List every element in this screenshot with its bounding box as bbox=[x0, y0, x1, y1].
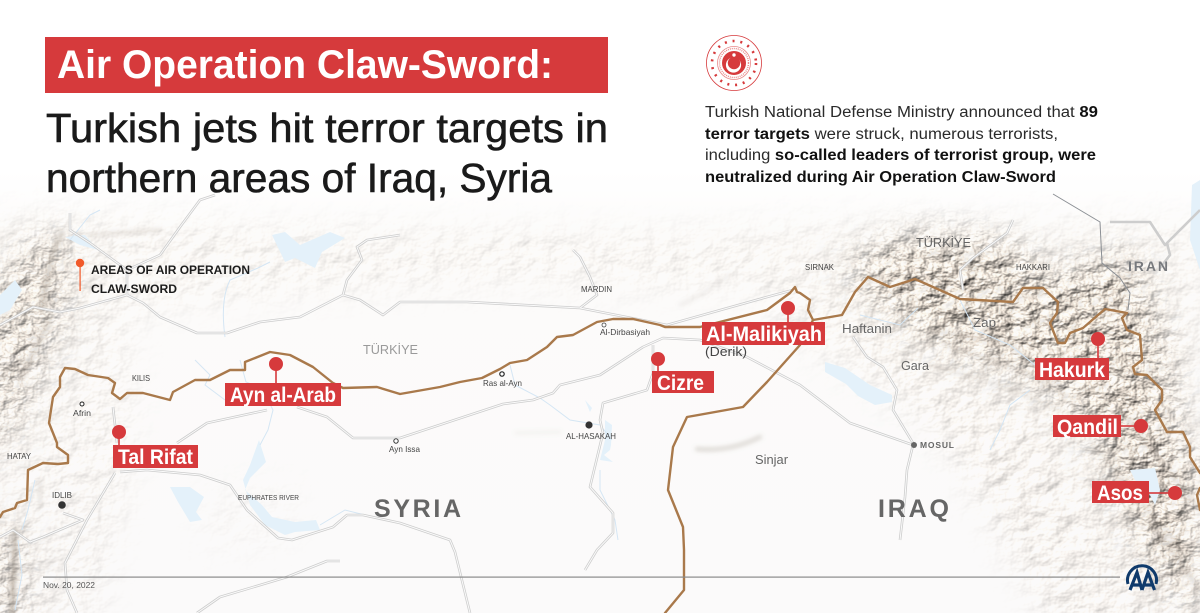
ministry statement: terror targets were struck, numerous terrorists, bbox=[705, 126, 1058, 143]
marker: Al-Malikiyah: Al-Malikiyah bbox=[706, 323, 822, 346]
marker: Tal Rifat: Tal Rifat bbox=[118, 446, 193, 469]
ministry statement: including so-called leaders of terrorist group, were bbox=[705, 147, 1096, 164]
icon: defense ministry emblem bbox=[706, 36, 762, 90]
map place labels: IDLIB bbox=[52, 490, 72, 500]
map place labels: KILIS bbox=[132, 373, 150, 383]
marker: Cizre bbox=[652, 352, 714, 395]
marker: Al-Malikiyah bbox=[702, 302, 825, 346]
footer rule bbox=[43, 576, 1120, 578]
map place labels: Gara bbox=[901, 358, 930, 373]
map place labels: Haftanin bbox=[842, 321, 892, 336]
marker: Qandil: Qandil bbox=[1057, 416, 1118, 439]
date: Nov. 20, 2022 bbox=[43, 580, 95, 590]
map place labels: (Derik) bbox=[705, 344, 747, 359]
marker: Ayn al-Arab: Ayn al-Arab bbox=[230, 384, 336, 407]
national borders bbox=[0, 277, 1200, 613]
map place labels: Sinjar bbox=[755, 452, 789, 467]
map place labels: MARDIN bbox=[581, 284, 612, 294]
map background bbox=[0, 170, 1200, 613]
water bodies bbox=[0, 180, 1200, 535]
legend: areas of air operation bbox=[76, 259, 250, 296]
subtitle bbox=[46, 105, 608, 201]
map place labels: HAKKARI bbox=[1016, 262, 1050, 272]
map place labels: Zap bbox=[973, 315, 996, 330]
map place labels: IRAN bbox=[1128, 258, 1168, 274]
map place labels bbox=[7, 235, 1168, 523]
ministry statement: neutralized during Air Operation Claw-Sword bbox=[705, 169, 1056, 186]
marker: Hakurk bbox=[1035, 332, 1109, 382]
icon: AA logo bbox=[1127, 566, 1156, 590]
map place labels: TÜRKİYE bbox=[916, 235, 971, 250]
map place labels: Al-Dirbasiyah bbox=[600, 327, 650, 337]
map place labels: Afrin bbox=[73, 408, 91, 418]
map place labels: Ras al-Ayn bbox=[483, 378, 522, 388]
title banner: Air Operation Claw-Sword: bbox=[57, 43, 553, 87]
marker: Asos bbox=[1092, 481, 1182, 505]
legend: areas of air operation: CLAW-SWORD bbox=[91, 282, 177, 296]
map place labels: HATAY bbox=[7, 451, 31, 461]
map place labels: EUPHRATES RIVER bbox=[238, 493, 300, 502]
subtitle: Turkish jets hit terror targets in bbox=[46, 105, 608, 151]
legend: areas of air operation: AREAS OF AIR OPERATION bbox=[91, 263, 250, 277]
rivers bbox=[15, 210, 1035, 610]
marker: Cizre: Cizre bbox=[657, 372, 704, 395]
marker: Qandil bbox=[1053, 415, 1148, 439]
map place labels: Ayn Issa bbox=[389, 444, 420, 454]
ministry statement bbox=[705, 104, 1098, 186]
marker: Asos: Asos bbox=[1097, 482, 1143, 505]
map place labels: SYRIA bbox=[374, 495, 461, 523]
map place labels: AL-HASAKAH bbox=[566, 431, 616, 441]
map place labels: IRAQ bbox=[878, 495, 949, 523]
roads bbox=[0, 194, 1200, 613]
map place labels: MOSUL bbox=[920, 440, 954, 450]
ministry statement: Turkish National Defense Ministry announced that 89 bbox=[705, 104, 1098, 121]
marker: Tal Rifat bbox=[112, 426, 198, 469]
marker: Hakurk: Hakurk bbox=[1039, 359, 1105, 382]
map place labels: SIRNAK bbox=[805, 262, 834, 272]
marker: Ayn al-Arab bbox=[225, 358, 341, 407]
map place labels: TÜRKİYE bbox=[363, 342, 418, 357]
subtitle: northern areas of Iraq, Syria bbox=[46, 155, 552, 201]
